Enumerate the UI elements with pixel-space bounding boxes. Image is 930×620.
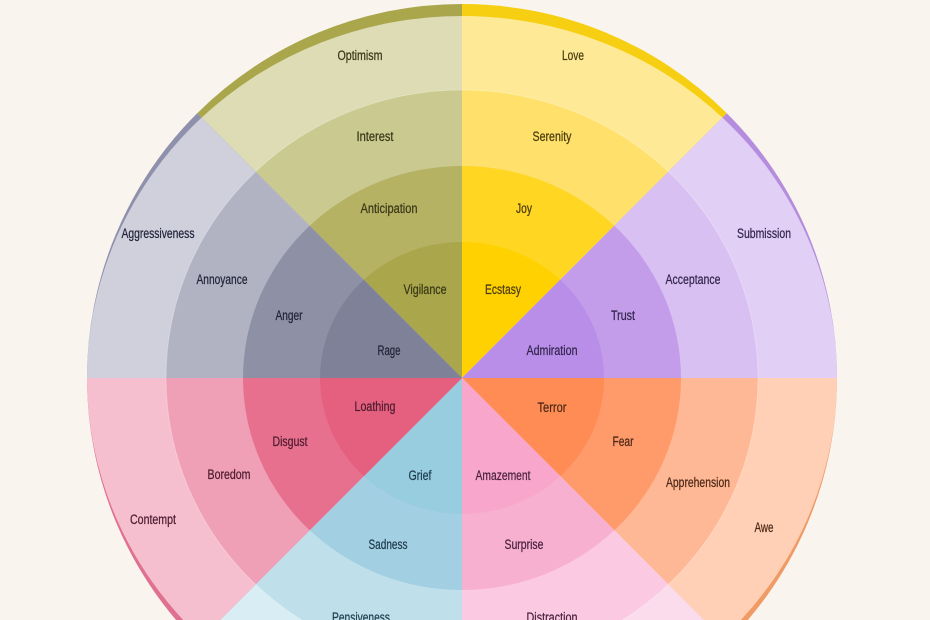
panel: distraction to amazement sector bbox=[462, 378, 727, 620]
panel: awe to terror sector: Fear bbox=[612, 434, 634, 449]
panel: pensiveness to grief sector: Grief bbox=[408, 468, 432, 483]
panel: awe to terror sector: Apprehension bbox=[666, 475, 730, 490]
panel: love to ecstasy sector bbox=[462, 4, 727, 378]
panel: aggressiveness to rage sector bbox=[87, 113, 462, 378]
panel: love to ecstasy sector: Serenity bbox=[532, 129, 572, 144]
panel: contempt to loathing sector: Contempt bbox=[130, 512, 176, 527]
panel: submission to admiration sector bbox=[462, 113, 837, 378]
panel: submission to admiration sector: Acceptance bbox=[666, 272, 720, 287]
panel: submission to admiration sector: Trust bbox=[611, 308, 635, 323]
panel: awe to terror sector: Terror bbox=[538, 400, 567, 415]
panel: aggressiveness to rage sector: Aggressiveness bbox=[122, 226, 195, 241]
panel: optimism to vigilance sector: Vigilance bbox=[404, 282, 446, 297]
panel: contempt to loathing sector: Boredom bbox=[208, 467, 250, 482]
panel: love to ecstasy sector: Joy bbox=[516, 201, 532, 216]
panel: aggressiveness to rage sector: Annoyance bbox=[196, 272, 248, 287]
panel: optimism to vigilance sector: Anticipation bbox=[360, 201, 418, 216]
panel: aggressiveness to rage sector: Rage bbox=[378, 343, 400, 358]
panel: love to ecstasy sector: Ecstasy bbox=[485, 282, 521, 297]
panel: submission to admiration sector: Admiration bbox=[526, 343, 578, 358]
panel: submission to admiration sector: Submission bbox=[737, 226, 791, 241]
panel: optimism to vigilance sector: Optimism bbox=[338, 48, 382, 63]
panel: distraction to amazement sector: Surprise bbox=[504, 537, 544, 552]
panel: love to ecstasy sector: Love bbox=[562, 48, 584, 63]
panel: optimism to vigilance sector: Interest bbox=[356, 129, 394, 144]
panel: aggressiveness to rage sector: Anger bbox=[276, 308, 303, 323]
panel: contempt to loathing sector: Loathing bbox=[354, 399, 396, 414]
panel: awe to terror sector bbox=[462, 378, 837, 620]
panel: distraction to amazement sector: Amazement bbox=[476, 468, 531, 483]
panel: contempt to loathing sector bbox=[87, 378, 462, 620]
panel: pensiveness to grief sector bbox=[197, 378, 462, 620]
panel: optimism to vigilance sector bbox=[197, 4, 462, 378]
panel: pensiveness to grief sector: Sadness bbox=[368, 537, 408, 552]
panel: awe to terror sector: Awe bbox=[754, 520, 774, 535]
panel: contempt to loathing sector: Disgust bbox=[272, 434, 308, 449]
